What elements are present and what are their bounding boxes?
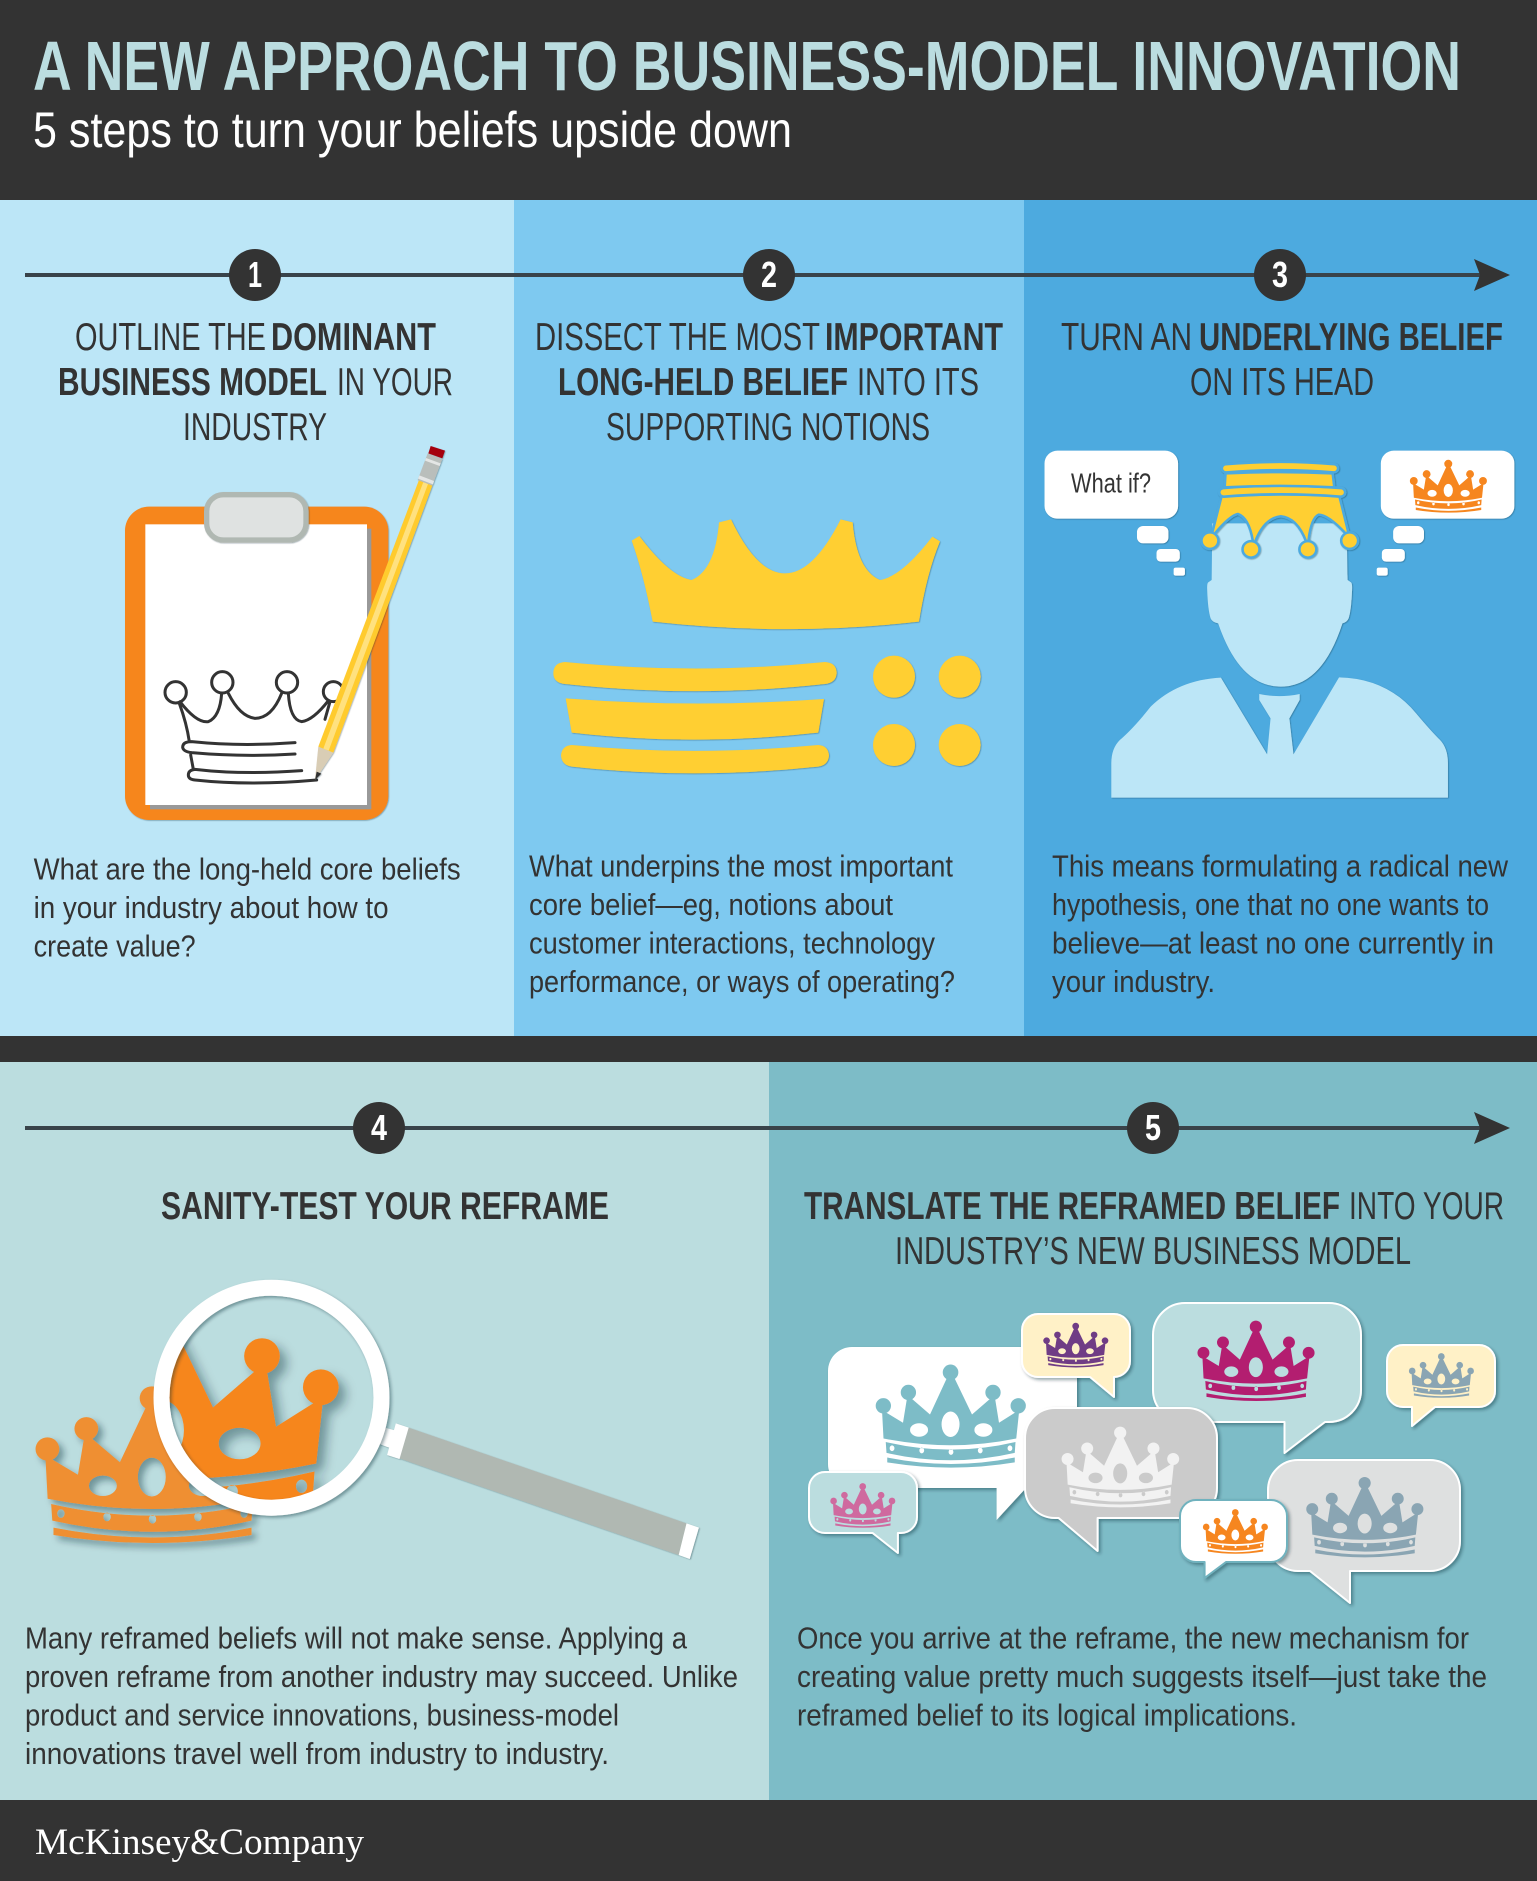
left thought bubble bbox=[1045, 451, 1185, 576]
panel: step 3 background bbox=[1024, 200, 1537, 1036]
body text: step 5: reframed belief to its logical implications. bbox=[797, 1698, 1297, 1732]
bubble: grey with white crown bbox=[1025, 1408, 1217, 1551]
header banner bbox=[0, 0, 1537, 200]
step number 3: 3 bbox=[1272, 254, 1288, 295]
step number 4: 4 bbox=[371, 1107, 387, 1148]
magnified crown bbox=[170, 1338, 352, 1500]
heading: step 3: TURN AN bbox=[1061, 316, 1192, 359]
label: What if?: What if? bbox=[1071, 468, 1151, 498]
body text: step 3: hypothesis, one that no one wants to bbox=[1052, 888, 1489, 922]
body text: step 5 bbox=[797, 1622, 1487, 1732]
step number 3 bbox=[1254, 249, 1306, 301]
step number 1 bbox=[229, 249, 281, 301]
step number 5 bbox=[1127, 1102, 1179, 1154]
body text: step 4: product and service innovations, business-model bbox=[25, 1698, 619, 1732]
step number 5: 5 bbox=[1145, 1107, 1161, 1148]
body text: step 4: innovations travel well from industry to industry. bbox=[25, 1737, 609, 1771]
heading: step 3 bbox=[1061, 316, 1503, 404]
body text: step 5: Once you arrive at the reframe, the new mechanism for bbox=[797, 1622, 1469, 1656]
heading: step 2: DISSECT THE MOST bbox=[535, 316, 820, 359]
heading: step 2: SUPPORTING NOTIONS bbox=[606, 406, 930, 449]
bubble: white with teal crown bbox=[828, 1347, 1077, 1520]
panel: step 5 background bbox=[769, 1062, 1537, 1800]
body text: step 1: in your industry about how to bbox=[34, 891, 389, 925]
upside-down crown bbox=[1203, 466, 1357, 556]
bubble: light teal with pink crown bbox=[809, 1472, 917, 1553]
step number 2 bbox=[743, 249, 795, 301]
divider band between rows bbox=[0, 1036, 1537, 1062]
body text: step 3: your industry. bbox=[1052, 965, 1215, 999]
heading: step 1: INDUSTRY bbox=[183, 406, 327, 449]
body text: step 1: create value? bbox=[34, 930, 196, 964]
heading: step 2 bbox=[535, 316, 1003, 449]
body text: step 4: proven reframe from another industry may succeed. Unlike bbox=[25, 1660, 738, 1694]
body text: step 2: performance, or ways of operating? bbox=[529, 965, 955, 999]
clip bbox=[207, 495, 306, 540]
head bbox=[1207, 523, 1352, 687]
shoulders and tie bbox=[1111, 677, 1448, 798]
heading: step 1: IN YOUR bbox=[337, 361, 453, 404]
body text: step 1: What are the long-held core beliefs bbox=[34, 852, 461, 886]
lens interior bbox=[168, 1294, 376, 1502]
heading: step 5: TRANSLATE THE REFRAMED BELIEF bbox=[804, 1185, 1340, 1228]
panel: step 1 background bbox=[0, 200, 514, 1036]
clipboard board bbox=[125, 507, 388, 820]
paper shadow bbox=[150, 529, 371, 809]
heading: step 3: ON ITS HEAD bbox=[1190, 361, 1374, 404]
panel: step 2 background bbox=[514, 200, 1024, 1036]
arrow: bottom timeline bbox=[25, 1112, 1510, 1144]
heading: step 1: OUTLINE THE bbox=[75, 316, 266, 359]
icon: orange crown in thought bubble bbox=[1410, 460, 1487, 513]
icon: clipboard with crown sketch and pencil bbox=[125, 446, 445, 820]
heading: step 2: LONG-HELD BELIEF bbox=[558, 361, 848, 404]
heading: step 2: INTO ITS bbox=[857, 361, 979, 404]
body text: step 4: Many reframed beliefs will not make sense. Applying a bbox=[25, 1622, 687, 1656]
step number 2: 2 bbox=[761, 254, 777, 295]
body text: step 5: creating value pretty much suggests itself—just take the bbox=[797, 1660, 1487, 1694]
bubble: light grey with grey-blue crown bbox=[1268, 1460, 1460, 1603]
panel: step 4 background bbox=[0, 1062, 769, 1800]
icon: magnifying glass over crown bbox=[0, 1288, 699, 1559]
heading: step 2: IMPORTANT bbox=[825, 316, 1003, 359]
body text: step 1 bbox=[34, 852, 461, 964]
arrow: top timeline bbox=[25, 259, 1510, 291]
pencil bbox=[315, 446, 445, 780]
background crown bbox=[36, 1386, 269, 1543]
body text: step 4 bbox=[25, 1622, 738, 1771]
bubble: light teal with magenta crown bbox=[1153, 1303, 1361, 1453]
icon: person with inverted crown bbox=[1045, 451, 1514, 798]
footer bar bbox=[0, 1800, 1537, 1881]
heading: step 1: BUSINESS MODEL bbox=[58, 361, 327, 404]
icon: deconstructed crown parts bbox=[553, 519, 981, 773]
body text: step 2: core belief—eg, notions about bbox=[529, 888, 893, 922]
lens ring bbox=[162, 1288, 382, 1508]
right thought bubble bbox=[1377, 451, 1514, 576]
icon: speech bubbles with crowns bbox=[809, 1303, 1495, 1603]
magnifier handle bbox=[377, 1423, 699, 1559]
crown sketch bbox=[165, 672, 343, 783]
body text: step 3 bbox=[1052, 850, 1509, 999]
heading: step 5 bbox=[804, 1185, 1504, 1273]
bubble: white with orange crown bbox=[1180, 1500, 1287, 1578]
subtitle: 5 steps to turn your beliefs upside down bbox=[33, 102, 792, 158]
step number 4 bbox=[353, 1102, 405, 1154]
heading: step 1: DOMINANT bbox=[271, 316, 436, 359]
heading: step 1 bbox=[58, 316, 453, 449]
body text: step 2 bbox=[529, 850, 955, 999]
body text: step 2: customer interactions, technology bbox=[529, 926, 936, 960]
paper bbox=[145, 524, 367, 805]
bubble: cream with grey-blue crown bbox=[1387, 1345, 1495, 1426]
body text: step 2: What underpins the most important bbox=[529, 850, 953, 884]
body text: step 3: believe—at least no one currently in bbox=[1052, 926, 1494, 960]
bubble: cream with purple crown bbox=[1022, 1314, 1130, 1397]
step number 1: 1 bbox=[248, 254, 262, 295]
heading: step 4: SANITY-TEST YOUR REFRAME bbox=[161, 1185, 609, 1228]
logo: McKinsey&Company: McKinsey&Company bbox=[35, 1822, 364, 1863]
